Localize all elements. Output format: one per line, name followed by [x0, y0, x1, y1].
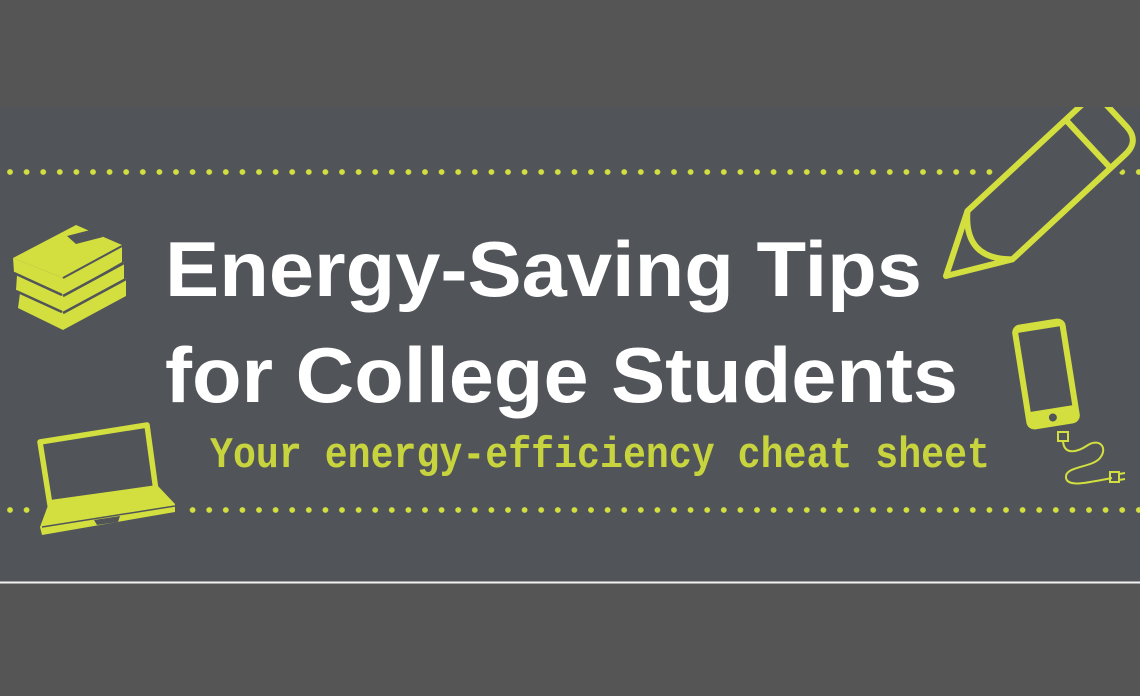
dotted line top	[0, 167, 1140, 177]
white divider line	[0, 582, 1140, 584]
top band	[0, 0, 1140, 107]
title: for College Students	[165, 331, 958, 419]
icon: laptop	[36, 425, 188, 535]
main panel	[0, 107, 1140, 582]
icon: books	[13, 225, 126, 330]
subtitle: Your energy-efficiency cheat sheet	[210, 431, 990, 481]
title: Energy-Saving Tips	[165, 225, 922, 313]
dotted line bottom	[0, 505, 1140, 515]
bottom band	[0, 584, 1140, 696]
icon: phone with charger	[1011, 317, 1125, 483]
icon: pencil	[943, 107, 1136, 279]
title	[165, 225, 958, 419]
